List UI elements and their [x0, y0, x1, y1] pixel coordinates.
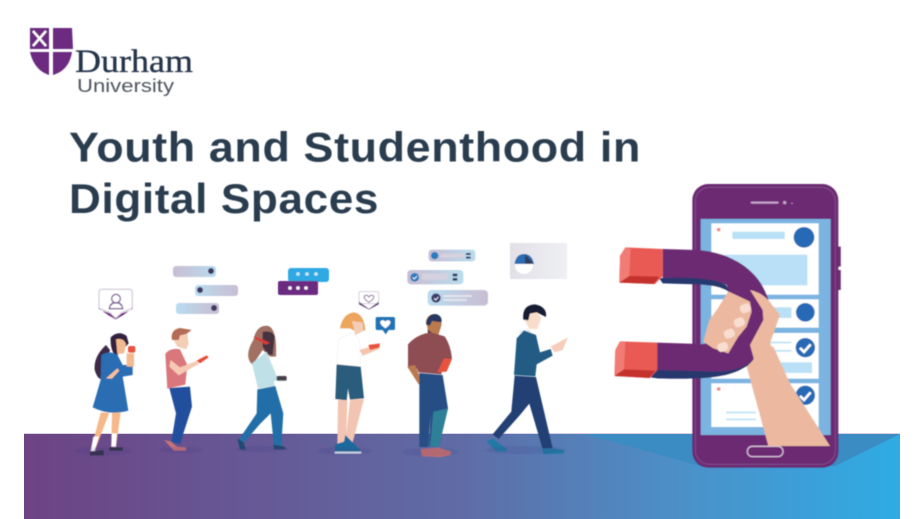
chat bubbles: dots: [278, 268, 329, 295]
card 2: [711, 299, 819, 328]
foot shadows: [75, 446, 565, 456]
phone screen: [701, 219, 831, 435]
magnet top pole: [619, 247, 663, 284]
icon: profile speech bubble: [99, 289, 132, 319]
icon: outline heart bubble: [359, 292, 379, 310]
phone speaker: [751, 201, 793, 204]
card 3: [711, 333, 819, 379]
logo subtitle: University: [77, 76, 174, 96]
phone home button: [747, 446, 783, 457]
floor band: [24, 433, 900, 519]
logo: Durham University: [30, 28, 193, 96]
magnet bottom pole: [614, 341, 657, 378]
title: Youth and Studenthood in: [69, 124, 641, 170]
person 4: woman with phone and heart: [335, 312, 380, 454]
magnet shadow: [651, 278, 754, 379]
chat pills: left group: [173, 266, 238, 314]
title: [69, 124, 641, 222]
magnet: [657, 249, 770, 379]
icons: heart bubbles: [359, 292, 395, 334]
title: Digital Spaces: [69, 175, 379, 222]
phone body: [692, 184, 838, 468]
card 1: [711, 223, 819, 295]
phone and magnet: [614, 184, 841, 468]
card 4: [711, 383, 819, 427]
person 6: man walking in navy sweater: [487, 304, 568, 454]
phone shadow: [585, 434, 900, 466]
person 1: girl in blue dress: [90, 333, 135, 455]
arm: [747, 347, 830, 446]
person 3: woman with long hair: [237, 326, 287, 450]
phone side buttons: [838, 247, 841, 290]
logo wordmark: Durham: [75, 44, 193, 80]
icon: shield: [30, 28, 73, 75]
icon: blue heart bubble: [376, 317, 395, 334]
notification pills: right group: [407, 250, 488, 306]
person 2: man in pink shirt: [164, 328, 209, 451]
hand fingers: [703, 290, 787, 377]
chart card: [510, 243, 567, 279]
person 5: bearded man in maroon shirt: [407, 314, 452, 457]
